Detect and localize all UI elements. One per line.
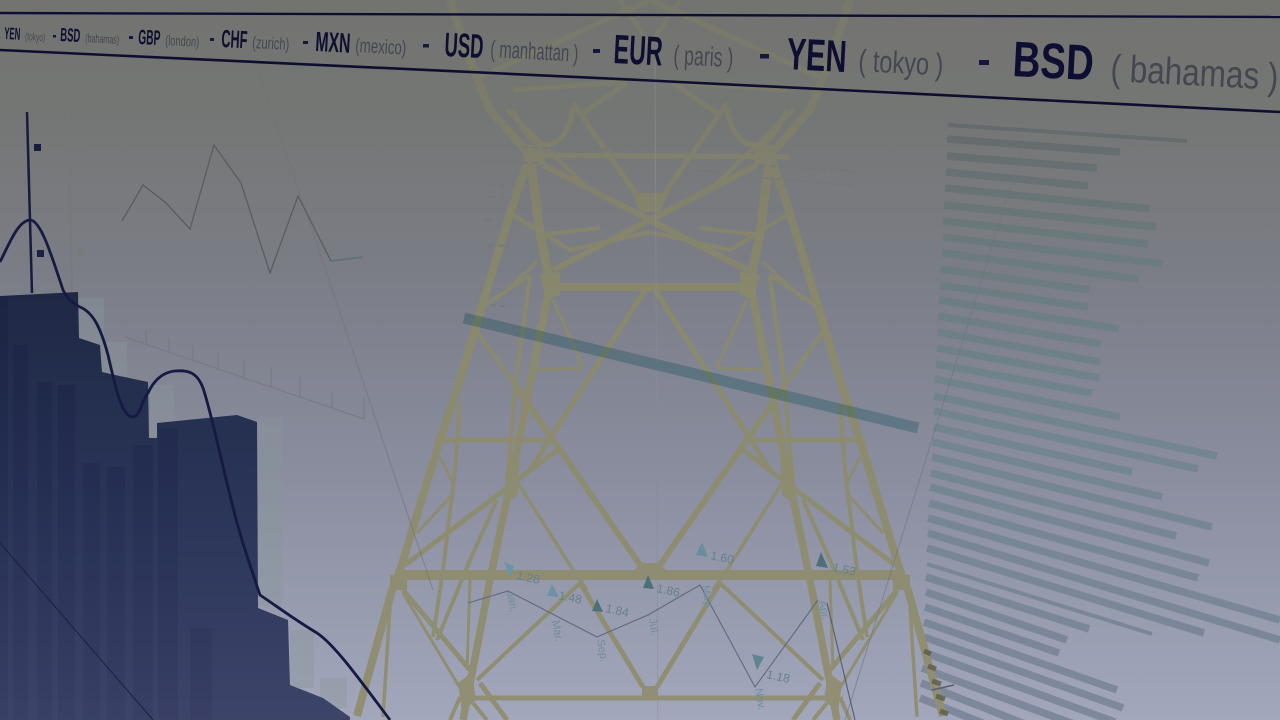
marker 1.84 bbox=[592, 599, 630, 620]
marker 1.86: 1.86 bbox=[655, 581, 681, 600]
ticker band: (bahamas) bbox=[85, 31, 120, 47]
ticker band: (zurich) bbox=[252, 33, 290, 54]
marker 1.48: 1.48 bbox=[557, 588, 583, 607]
panel: right horizontal bar chart bbox=[920, 125, 1280, 720]
faint center guide line bbox=[655, 60, 658, 720]
faint diagonal guide left bbox=[255, 60, 433, 590]
vertical axis bbox=[27, 112, 32, 293]
ticker band: BSD bbox=[1011, 31, 1095, 91]
ticker bottom rule bbox=[0, 50, 1280, 112]
chart line tail bbox=[827, 603, 855, 720]
thin line series bbox=[122, 145, 331, 273]
marker 1.18 bbox=[752, 654, 791, 686]
month labels: Apr. bbox=[816, 599, 831, 621]
darker inner columns bbox=[0, 296, 212, 720]
ticker band bbox=[0, 13, 1280, 112]
marker 1.28 bbox=[504, 562, 541, 587]
chart line bbox=[468, 585, 818, 687]
axis marker lower bbox=[37, 250, 44, 257]
marker 1.60 bbox=[696, 542, 735, 567]
ticker band: YEN bbox=[785, 28, 848, 82]
series tail bbox=[331, 257, 363, 261]
dark overlaps on right tower leg bbox=[924, 651, 948, 714]
faint diagonal guide right bbox=[845, 140, 1025, 720]
ticker band: (london) bbox=[165, 32, 200, 50]
ticker band: (tokyo) bbox=[25, 31, 45, 44]
axis with ticks bbox=[125, 330, 364, 419]
faint secondary axis bbox=[68, 112, 84, 290]
ticker band: YEN bbox=[4, 24, 21, 44]
marker 1.53 bbox=[816, 552, 857, 579]
marker 1.53: 1.53 bbox=[831, 560, 857, 579]
marker 1.86 bbox=[643, 575, 681, 600]
month labels: Jan. bbox=[504, 590, 519, 613]
marker 1.48 bbox=[547, 584, 583, 607]
ticker separators bbox=[53, 35, 989, 65]
dark smooth curve bbox=[0, 220, 390, 720]
ticker band: CHF bbox=[221, 25, 248, 54]
ticker band: EUR bbox=[613, 26, 664, 75]
faint text rows near tower top bbox=[482, 124, 860, 306]
panel: transmission tower bbox=[357, 0, 943, 720]
month labels: Mar. bbox=[549, 619, 565, 643]
month labels bbox=[504, 584, 831, 711]
ticker band: USD bbox=[444, 26, 485, 66]
marker 1.28: 1.28 bbox=[515, 568, 541, 587]
ticker band: (mexico) bbox=[355, 35, 407, 60]
bar silhouette bbox=[0, 292, 350, 720]
diagonal blue band bbox=[464, 318, 918, 428]
tower cross beams bbox=[395, 155, 905, 700]
diagonal hairline on bars bbox=[0, 543, 153, 720]
ticker band: BSD bbox=[60, 25, 81, 47]
axis marker top bbox=[34, 144, 41, 151]
tower right half bbox=[553, 0, 943, 720]
ticker top rule bbox=[0, 13, 1280, 17]
ticker band: ( manhattan ) bbox=[490, 36, 579, 68]
marker 1.60: 1.60 bbox=[709, 548, 735, 567]
month labels: Jul. bbox=[646, 617, 661, 636]
marker 1.18: 1.18 bbox=[765, 667, 791, 686]
panel: upper thin line chart bbox=[122, 145, 364, 419]
ticker band: GBP bbox=[138, 26, 161, 50]
panel: lower line chart with markers bbox=[468, 542, 857, 720]
marker 1.84: 1.84 bbox=[604, 601, 630, 620]
ticker band: MXN bbox=[315, 26, 351, 59]
ticker band: ( paris ) bbox=[673, 40, 734, 73]
month labels: Sep. bbox=[594, 638, 610, 663]
small tick at tower leg bbox=[932, 685, 954, 690]
panel: dark stepped bar chart bbox=[0, 292, 350, 720]
tower left half bbox=[357, 0, 747, 720]
month labels: May. bbox=[699, 584, 715, 609]
ticker band: ( tokyo ) bbox=[858, 43, 944, 82]
panel: pale shadow bars bbox=[78, 298, 347, 708]
month labels: Nov. bbox=[752, 687, 768, 711]
